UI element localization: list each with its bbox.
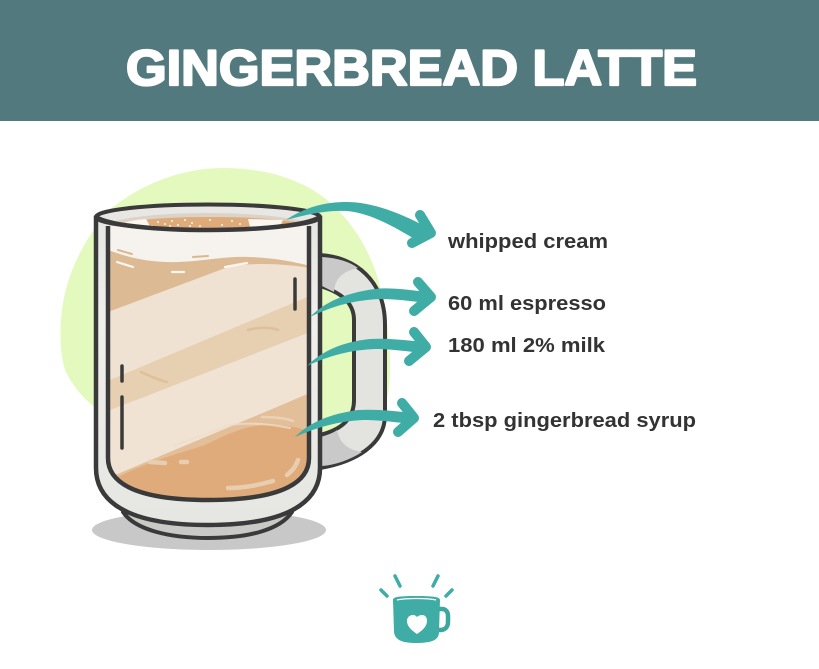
rim front edge [96,217,320,230]
drink surface [112,213,306,228]
icon: teal mug with heart [381,576,452,643]
arrow: whipped cream [286,202,431,243]
arrow: espresso [310,282,431,317]
highlights [117,250,298,488]
syrup layer [118,425,307,498]
icon heart [407,615,427,634]
upper coffee layer [108,250,310,400]
glass reflection marks [122,279,295,448]
mug shadow [92,510,326,550]
foam layer [110,226,306,265]
arrow: gingerbread syrup [295,403,414,437]
title: GINGERBREAD LATTE [126,40,697,96]
arrow: milk [307,332,426,366]
drink layers [110,226,307,498]
light band two [108,332,310,478]
icon body [393,596,440,643]
icon rim [397,598,436,600]
label: whipped cream: whipped cream [447,231,608,253]
latte glass mug [96,204,385,538]
mug foot [123,512,292,538]
handle shading [322,257,362,466]
label: gingerbread syrup: 2 tbsp gingerbread syrup [433,410,696,432]
mug rim [96,204,320,230]
icon handle [438,609,448,630]
tan band [108,296,310,411]
label: espresso: 60 ml espresso [448,293,606,315]
mug handle [320,255,385,468]
light band one [108,264,310,381]
icon rays [381,576,452,596]
lower mix layer [116,394,307,477]
inner wall outline [108,226,309,500]
label: milk: 180 ml 2% milk [448,335,606,357]
header banner [0,0,819,121]
green background blob [60,168,390,441]
foam speckles [122,219,283,227]
mug outer body [96,218,320,525]
